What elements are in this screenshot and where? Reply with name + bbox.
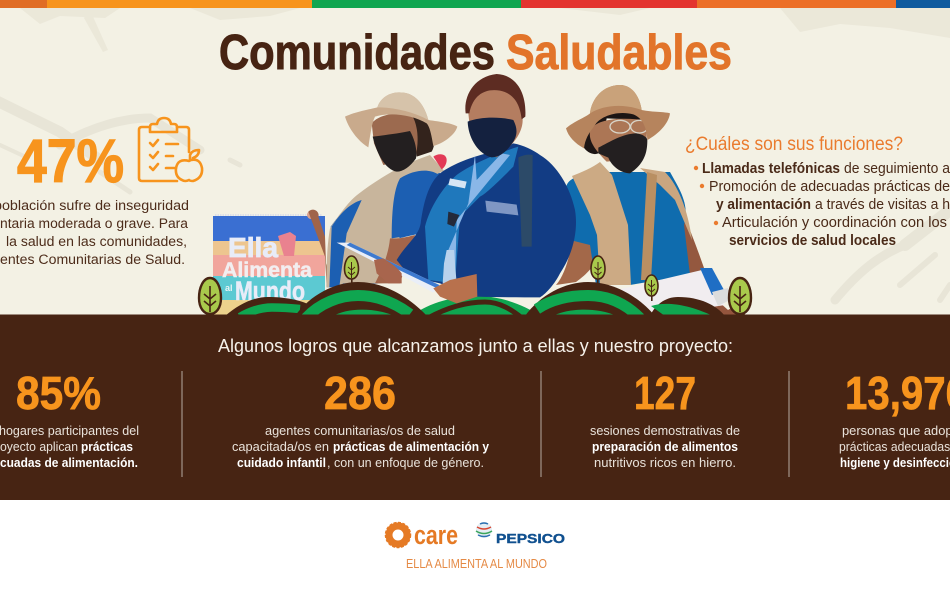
calendar: Ella Alimenta al Mundo xyxy=(213,211,325,315)
statistic: 47%: 47% xyxy=(17,127,124,195)
panel: functions list: Promoción de adecuadas prácticas de xyxy=(709,179,950,195)
icon: small tree centre right xyxy=(591,256,605,285)
icon: tree far right xyxy=(729,278,751,316)
stat: 85% households: 85% xyxy=(16,367,101,419)
panel: functions list: Llamadas telefónicas xyxy=(702,161,840,177)
title xyxy=(220,33,731,70)
stat: 85% households: hogares participantes del xyxy=(0,424,139,438)
functions heading: ¿Cuáles son sus funciones? xyxy=(685,134,903,155)
stat: 286 agents xyxy=(232,367,489,470)
panel: functions list: y alimentación xyxy=(716,197,811,213)
top colour bar xyxy=(0,0,950,8)
logo: PepsiCo xyxy=(476,522,564,544)
text block: food insecurity xyxy=(0,198,189,267)
stat: 286 agents: , con un enfoque de género. xyxy=(327,456,484,470)
icon: small tree right xyxy=(645,275,658,301)
stat: 127 sessions: preparación de alimentos xyxy=(592,440,738,454)
panel: functions list xyxy=(685,134,950,249)
stat: 85% households: oyecto aplican xyxy=(0,440,78,454)
panel: footer xyxy=(384,522,564,568)
logo: PepsiCo: PEPSICO xyxy=(496,531,565,546)
photo: central community health agent xyxy=(337,74,576,303)
stat: 286 agents: prácticas de alimentación y xyxy=(333,440,489,454)
stat: 286 agents: 286 xyxy=(324,367,396,419)
text block: food insecurity: ntaria moderada o grave. Para xyxy=(0,216,189,231)
text block: food insecurity: la salud en las comunidades, xyxy=(6,234,187,249)
stat: 85% households xyxy=(0,376,138,467)
stat: 127 sessions xyxy=(590,376,740,467)
stat: 127 sessions: sesiones demostrativas de xyxy=(590,424,740,438)
icon: clipboard checklist with apple xyxy=(139,118,202,181)
logo: CARE xyxy=(386,520,458,550)
icon: small tree centre left xyxy=(344,256,358,286)
tagline: ELLA ALIMENTA AL MUNDO xyxy=(406,556,547,571)
stat: 127 sessions: 127 xyxy=(634,367,696,419)
achievements heading: Algunos logros que alcanzamos junto a ellas y nuestro proyecto: xyxy=(218,335,733,356)
stat: 286 agents: agentes comunitarias/os de salud xyxy=(265,424,455,438)
title: Saludables xyxy=(506,26,732,80)
cream textured background xyxy=(0,8,950,316)
title: Comunidades xyxy=(219,26,495,80)
stat: 286 agents: cuidado infantil xyxy=(237,456,326,470)
panel: achievements band xyxy=(0,316,950,500)
calendar: Ella Alimenta al Mundo: al xyxy=(225,283,233,293)
calendar: Ella Alimenta al Mundo: Ella xyxy=(228,232,278,263)
panel: functions list: servicios de salud locales xyxy=(729,233,896,249)
stat: 13,976 people xyxy=(839,367,950,470)
illustration: middle hill behind central figure xyxy=(420,296,530,314)
calendar: Ella Alimenta al Mundo: Alimenta xyxy=(222,259,312,282)
stat: 85% households: prácticas xyxy=(81,440,133,454)
icon: tree far left xyxy=(199,278,221,316)
illustration: hills xyxy=(0,282,950,318)
photo: left community health agent xyxy=(308,92,457,287)
calendar: Ella Alimenta al Mundo: Mundo xyxy=(235,276,305,306)
text block: food insecurity: entes Comunitarias de Salud. xyxy=(0,252,185,267)
logo: CARE: care xyxy=(414,520,458,550)
stat: 286 agents: capacitada/os en xyxy=(232,440,329,454)
stat: 85% households: cuadas de alimentación. xyxy=(0,456,138,470)
panel: functions list: Articulación y coordinación con los xyxy=(722,215,947,231)
stat: 127 sessions: nutritivos ricos en hierro. xyxy=(594,456,736,470)
photo: right community health agent xyxy=(556,85,745,315)
